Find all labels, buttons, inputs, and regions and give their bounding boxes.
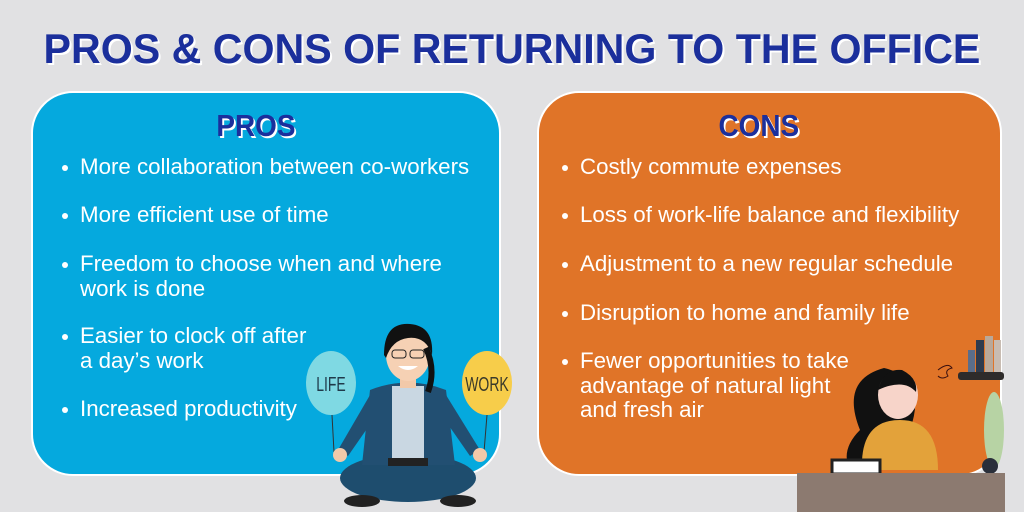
heading: pros: PROS <box>216 108 295 143</box>
text: Loss of work-life balance and flexibility <box>580 202 959 227</box>
text: Adjustment to a new regular schedule <box>580 251 953 276</box>
text: advantage of natural light <box>580 372 830 398</box>
balloon work <box>462 351 512 415</box>
text: Disruption to home and family life <box>580 300 910 325</box>
text: Increased productivity <box>80 396 297 421</box>
pros list <box>62 154 469 421</box>
balloon life: LIFE <box>316 372 346 396</box>
desk <box>797 473 1005 512</box>
text: More efficient use of time <box>80 202 329 227</box>
text: a day’s work <box>80 348 204 372</box>
text: and fresh air <box>580 397 704 422</box>
text: work is done <box>80 276 205 300</box>
cons list <box>562 154 960 422</box>
illustration: meditating woman with balloons <box>306 324 512 507</box>
text: Easier to clock off after <box>80 323 306 348</box>
text: More collaboration between co-workers <box>80 154 469 179</box>
balloon work: WORK <box>465 372 509 396</box>
text: Costly commute expenses <box>580 154 841 179</box>
text: Freedom to choose when and where <box>80 251 442 276</box>
panel: cons <box>537 91 1002 476</box>
heading: cons: CONS <box>718 108 799 143</box>
panel: pros <box>31 91 501 476</box>
balloon life <box>306 351 356 415</box>
text: Fewer opportunities to take <box>580 348 849 373</box>
illustration: stressed woman at desk <box>797 336 1005 512</box>
title: PROS & CONS OF RETURNING TO THE OFFICE <box>44 25 980 72</box>
